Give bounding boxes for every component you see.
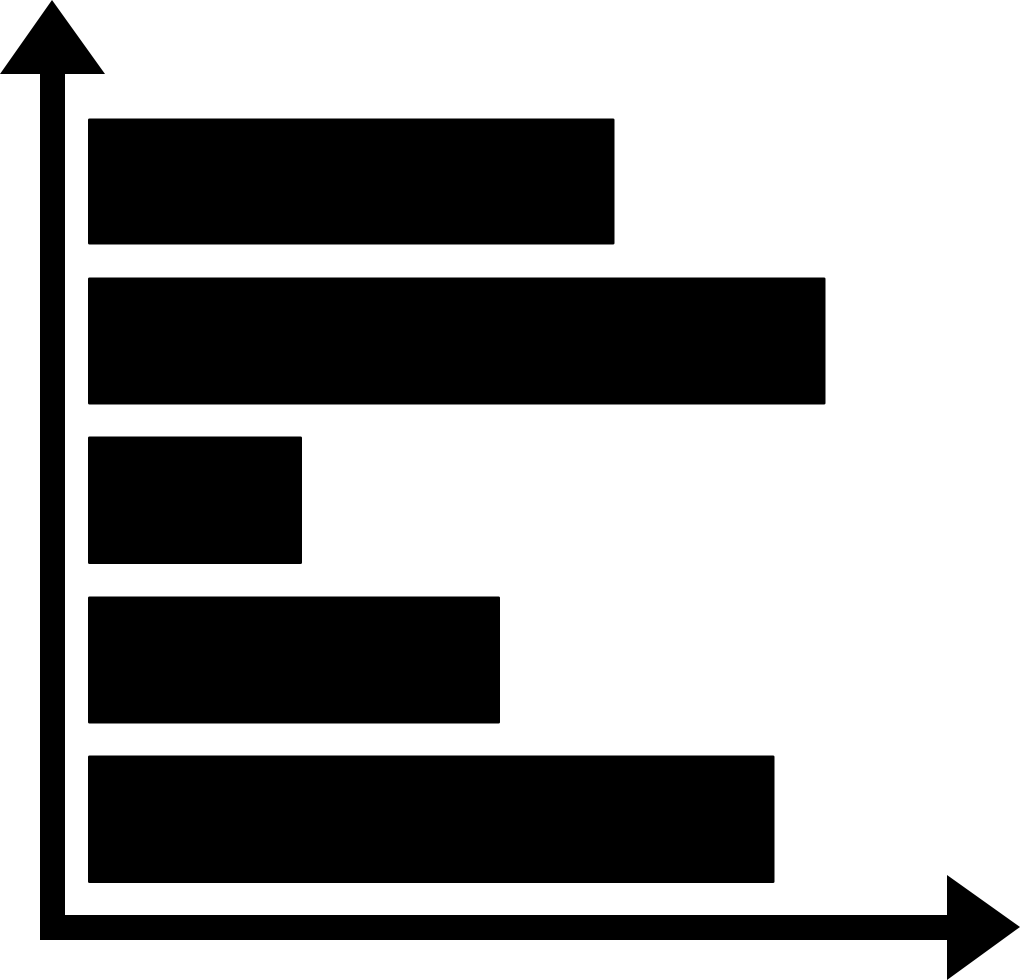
bar 2: [88, 278, 826, 404]
bar 3: [88, 436, 302, 564]
y axis arrow: [0, 0, 105, 915]
bar 4: [88, 596, 500, 724]
x axis arrow: [40, 875, 1020, 980]
bars: [88, 118, 826, 883]
bar 1: [88, 118, 614, 244]
bar 5: [88, 756, 774, 883]
